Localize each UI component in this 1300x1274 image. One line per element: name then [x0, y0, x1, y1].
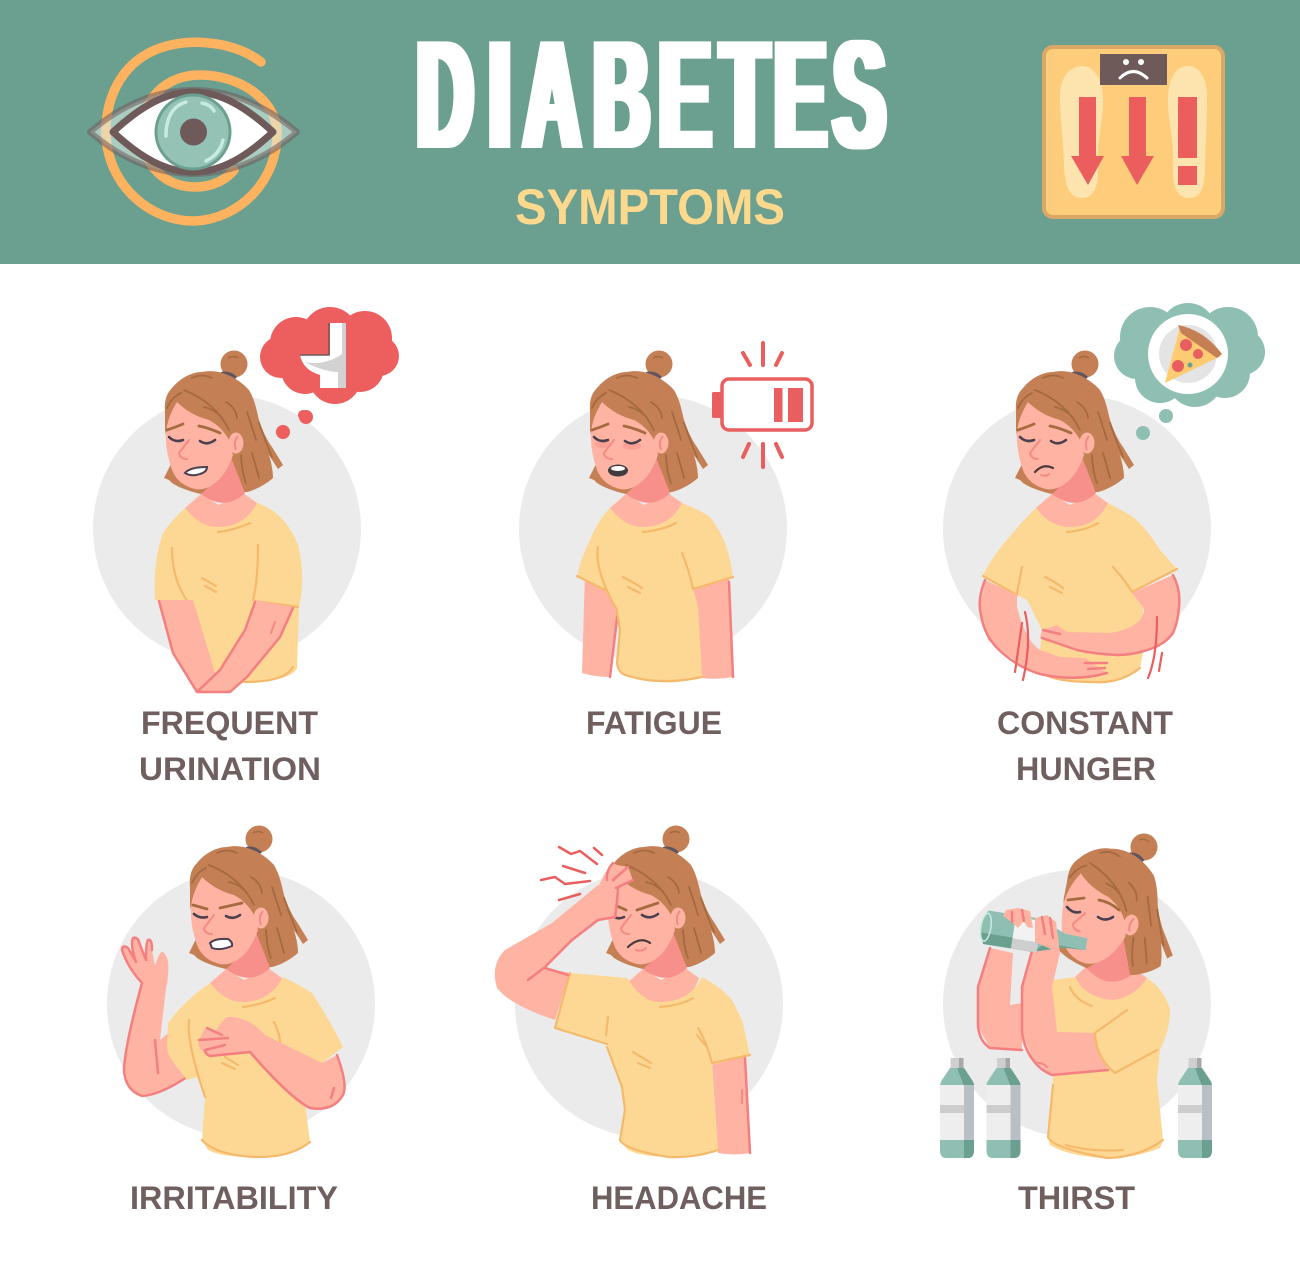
panel: frequent urination: [93, 307, 399, 693]
left arm with raised hand: [122, 938, 187, 1096]
panel: constant hunger: [943, 303, 1265, 682]
label: thirst: THIRST: [1018, 1180, 1135, 1216]
sleeve: [1095, 978, 1170, 1073]
background circle: [519, 395, 787, 663]
hand on forehead: [592, 863, 633, 920]
back arm: [978, 948, 1022, 1050]
label: headache: HEADACHE: [591, 1180, 767, 1216]
label: constant hunger: CONSTANT: [997, 705, 1173, 741]
woman figure: [495, 826, 750, 1157]
right arm with hand on chest: [198, 1017, 345, 1109]
bottle held to mouth: [978, 910, 1089, 960]
title: DIABETES: [417, 8, 885, 181]
panel: fatigue: [519, 343, 812, 682]
icon: blurred eye with spiral: [90, 42, 297, 221]
icon: headache pain lines: [541, 847, 602, 900]
panel: irritability: [107, 826, 375, 1157]
subtitle: SYMPTOMS: [515, 179, 785, 235]
background circle: [107, 870, 375, 1138]
background circle: [943, 395, 1211, 663]
raised arm: [495, 885, 612, 1020]
woman figure: [980, 350, 1179, 682]
woman figure: [577, 350, 733, 682]
woman figure: [978, 820, 1195, 1158]
woman figure: [122, 826, 345, 1157]
panel: headache: [495, 826, 783, 1157]
label: irritability: IRRITABILITY: [130, 1180, 338, 1216]
label: fatigue: FATIGUE: [586, 705, 722, 741]
label: frequent urination: FREQUENT: [141, 705, 318, 741]
label: frequent urination: URINATION: [139, 751, 321, 787]
thought bubble: pizza: [1114, 303, 1265, 440]
water bottles: [940, 1058, 1212, 1158]
background circle: [943, 870, 1211, 1138]
label: constant hunger: HUNGER: [1016, 751, 1156, 787]
front arm: [1022, 940, 1108, 1075]
background circle: [515, 870, 783, 1138]
label: frequent urination: [139, 705, 321, 787]
hands on bottle: [1003, 908, 1060, 953]
icon: low battery: [712, 343, 812, 467]
woman figure: [155, 350, 302, 693]
background circle: [93, 395, 361, 663]
thought bubble: toilet: [260, 307, 399, 439]
label: constant hunger: [997, 705, 1173, 787]
panel: thirst: [940, 820, 1212, 1158]
icon: weighing scale: [1044, 47, 1223, 217]
header banner: [0, 0, 1300, 264]
